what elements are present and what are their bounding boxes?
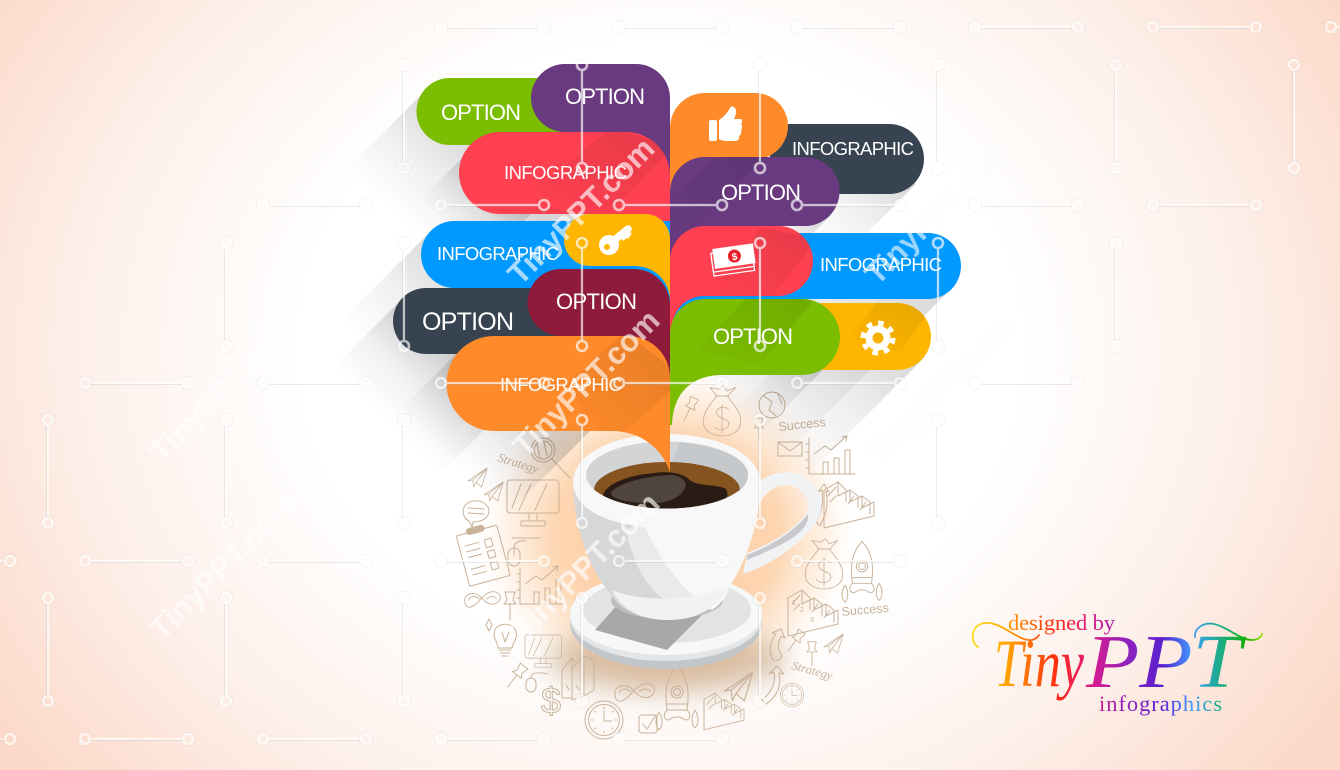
doodle: clock small	[780, 683, 804, 707]
watermarks: TinyPPT.com	[858, 131, 1018, 291]
bubble: purple option right: OPTION	[721, 180, 801, 205]
doodle: stairs numbered: 1	[792, 600, 796, 607]
doodle: monitor small	[525, 635, 561, 667]
doodle: infinity	[465, 592, 500, 607]
saucer ground shadow	[547, 626, 787, 694]
doodle: dollar: $	[541, 680, 561, 721]
icon: gear	[863, 323, 893, 353]
watermarks: TinyPPT.com	[506, 486, 666, 646]
watermarks: TinyPPT.com	[143, 309, 303, 469]
cup body	[573, 434, 760, 620]
doodle: rocket	[656, 666, 698, 730]
doodle: money bag	[703, 386, 741, 436]
bubble: red infographic	[459, 132, 670, 221]
doodle: small pin	[503, 663, 529, 690]
bubble: blue infographic: INFOGRAPHIC	[437, 243, 559, 264]
doodle: money bag right	[805, 539, 843, 589]
bubble: green option right: OPTION	[713, 324, 793, 349]
handle shading	[747, 514, 808, 560]
bubble: yellow key	[564, 214, 670, 298]
doodle: infinity bottom	[615, 684, 654, 701]
bubble: green option right	[670, 295, 840, 425]
doodle: mouse	[508, 538, 540, 566]
bubble: red money	[670, 226, 818, 335]
doodle: success label: Success	[778, 415, 826, 434]
bubble: dark infographic	[770, 124, 924, 194]
doodle: pin	[504, 592, 516, 620]
doodle: mouse small	[526, 673, 548, 692]
logo: T swashes	[973, 623, 1262, 647]
bubble: green option	[416, 78, 600, 145]
bubble: red infographic: INFOGRAPHIC	[504, 162, 627, 183]
cup handle	[743, 472, 822, 574]
doodle: pins lower right	[784, 629, 817, 666]
bubble: maroon option	[527, 269, 670, 390]
doodle: light bulb	[494, 624, 516, 656]
bubble: blue infographic	[421, 221, 670, 330]
body mid band	[626, 522, 712, 610]
bubble: yellow gear	[820, 298, 932, 370]
doodle: bar chart	[806, 436, 855, 474]
doodle: stairs numbered: 3	[810, 617, 814, 624]
icon: thumbs up	[709, 107, 742, 141]
doodle: growth chart	[517, 566, 566, 604]
doodle: speech bubble	[463, 501, 489, 527]
doodle icons around cup	[455, 386, 889, 739]
bubble: purple option right	[670, 157, 840, 260]
bubble: dark option: OPTION	[422, 308, 514, 336]
bubble: blue infographic right: INFOGRAPHIC	[820, 254, 942, 275]
body highlight	[642, 490, 760, 610]
saucer	[570, 573, 762, 669]
doodle: curved arrow	[770, 629, 785, 661]
doodle: stairs top	[824, 482, 874, 528]
bubble: dark option	[393, 288, 570, 354]
doodle: books	[562, 656, 594, 700]
doodle: clipboard	[455, 521, 510, 586]
doodle: strategy label: Strategy	[496, 450, 540, 476]
bubble: orange infographic with tail: INFOGRAPHIC	[500, 374, 622, 395]
icon: banknotes: $	[731, 252, 739, 263]
logo: PPT text: PPT	[1085, 620, 1246, 704]
interior highlight	[672, 442, 748, 492]
icon: key	[599, 229, 632, 255]
logo: designed by TinyPPT infographics	[973, 610, 1262, 716]
infographic bubbles: left stack	[393, 64, 674, 472]
bubble: dark infographic: INFOGRAPHIC	[792, 138, 914, 159]
watermarks: TinyPPT.com	[506, 303, 666, 463]
logo: infographics text: infographics	[1099, 691, 1222, 716]
coffee cup on saucer	[570, 434, 822, 669]
doodle: plane right	[824, 634, 843, 653]
warm glow behind cup	[472, 360, 862, 710]
doodle: arrow	[762, 666, 784, 704]
doodle: stairs bottom	[704, 693, 744, 730]
doodle: pin below globe	[754, 418, 764, 441]
cup foot band	[612, 586, 730, 620]
doodle: success label right: Success	[841, 601, 889, 619]
logo: Tiny text: Tiny	[994, 625, 1085, 701]
watermarks: TinyPPT.com	[501, 131, 661, 291]
doodle: magnifier	[531, 438, 570, 478]
doodle: stairs numbered: 2	[800, 607, 804, 614]
doodle: arrow right	[816, 484, 829, 526]
doodle: planes	[468, 468, 503, 501]
doodle: strategy label right: Strategy	[790, 658, 835, 683]
doodle: monitor	[507, 480, 559, 526]
icon: banknotes	[710, 243, 757, 276]
long shadows cast by bubbles	[333, 89, 951, 516]
bubble: orange infographic with tail	[447, 332, 674, 472]
infographic bubbles: right stack	[666, 93, 961, 425]
cup interior	[586, 442, 748, 508]
cup rim	[573, 434, 760, 528]
coffee	[594, 462, 740, 508]
logo: designed by text: designed by	[1008, 610, 1116, 635]
watermarks: TinyPPT.com	[861, 309, 1021, 469]
doodle: pushpin	[679, 396, 699, 423]
doodle: rocket right	[842, 542, 882, 602]
doodle: large plane	[724, 672, 753, 701]
doodle: clock	[585, 701, 623, 739]
watermarks: TinyPPT.com	[143, 486, 303, 646]
doodle: checkbox	[639, 715, 657, 733]
bubble: maroon option: OPTION	[556, 289, 637, 314]
bubble: green option: OPTION	[441, 100, 521, 125]
doodle: spark	[486, 619, 492, 631]
bubble: purple option: OPTION	[565, 84, 645, 109]
doodle: envelope	[778, 442, 802, 456]
watermarks	[143, 131, 1021, 646]
doodle: globe	[759, 392, 785, 418]
bubble: purple option	[531, 64, 670, 180]
bubble: orange thumb	[670, 93, 788, 200]
doodle: stairs numbered	[788, 590, 838, 636]
bubble: blue infographic right	[670, 233, 961, 340]
